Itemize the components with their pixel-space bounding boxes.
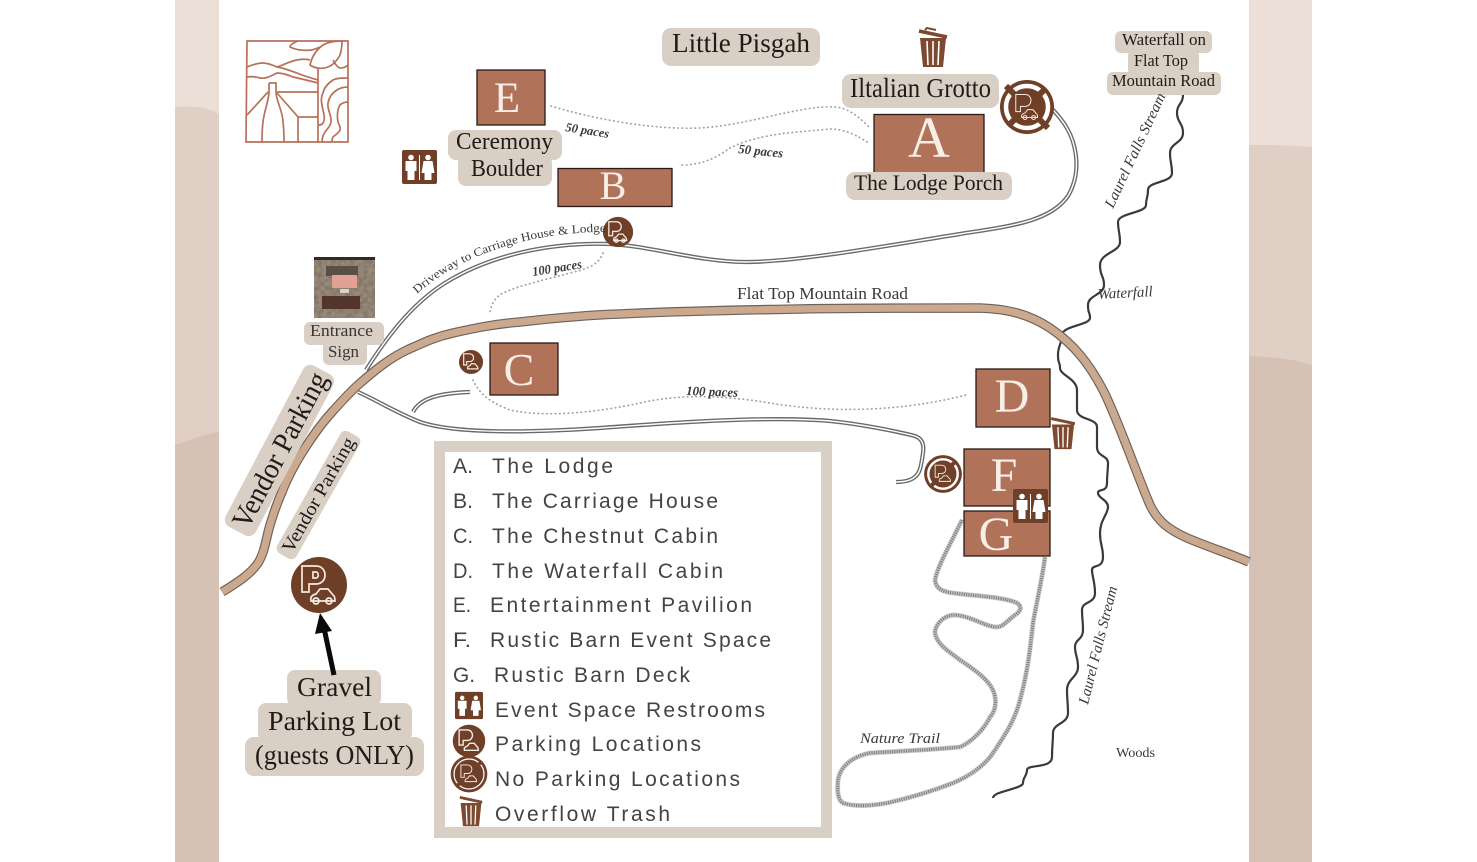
panel: legend xyxy=(440,446,826,832)
legend row F: Rustic Barn Event Space xyxy=(490,629,771,652)
legend row restrooms: Event Space Restrooms xyxy=(495,699,765,722)
label: Gravel Parking Lot (guests ONLY): (guests ONLY) xyxy=(255,740,414,770)
icon: no parking near lodge xyxy=(1000,80,1054,134)
legend row restrooms xyxy=(455,692,765,722)
legend row trash xyxy=(460,797,670,826)
building A: A xyxy=(908,105,950,170)
right background band xyxy=(1249,0,1312,862)
label: Gravel Parking Lot (guests ONLY): Gravel xyxy=(297,672,372,702)
label: The Lodge Porch: The Lodge Porch xyxy=(854,170,1003,195)
building E xyxy=(477,70,545,125)
caption: Nature Trail: Nature Trail xyxy=(859,731,940,747)
building G: G xyxy=(979,508,1013,561)
photo: entrance sign xyxy=(314,257,375,318)
legend row D: D. xyxy=(453,560,473,583)
label: Gravel Parking Lot (guests ONLY): Parking Lot xyxy=(268,706,402,736)
icon: parking at driveway xyxy=(603,217,633,247)
legend row B: B. xyxy=(453,490,473,513)
road: Flat Top Mountain Road xyxy=(222,308,1249,592)
caption: Waterfall: Waterfall xyxy=(1097,284,1153,303)
label: Ceremony Boulder xyxy=(448,129,562,186)
building D xyxy=(976,369,1050,427)
caption: 100 paces cabin: 100 paces xyxy=(686,383,738,400)
legend row B: The Carriage House xyxy=(492,490,718,513)
label: Little Pisgah xyxy=(662,28,820,66)
label: Italian Grotto: Iltalian Grotto xyxy=(850,73,991,103)
caption: 50 paces B: 50 paces xyxy=(738,141,784,161)
icon: restroom at barn xyxy=(1013,489,1048,523)
caption: 50 paces E: 50 paces xyxy=(565,120,610,141)
legend row no parking xyxy=(451,756,740,792)
label: Waterfall on Flat Top Mountain Road: Waterfall on xyxy=(1122,30,1206,49)
building B: B xyxy=(600,163,626,208)
legend row A: The Lodge xyxy=(492,455,613,478)
label: Waterfall on Flat Top Mountain Road: Flat Top xyxy=(1134,51,1188,70)
arrow: to gravel parking xyxy=(315,613,334,675)
building F xyxy=(964,449,1050,506)
caption: 100 paces driveway: 100 paces xyxy=(531,256,583,279)
label: Little Pisgah: Little Pisgah xyxy=(672,28,810,58)
building C: C xyxy=(504,344,534,395)
label: Ceremony Boulder: Boulder xyxy=(471,156,543,182)
legend row parking xyxy=(453,725,701,757)
icon: parking large xyxy=(291,557,347,613)
caption: Flat Top Mountain Road: Flat Top Mountain Road xyxy=(737,284,909,303)
icon: no parking near barn xyxy=(924,455,962,493)
label: Vendor Parking large: Vendor Parking xyxy=(226,367,334,534)
building D: D xyxy=(995,370,1029,423)
building E: E xyxy=(494,75,520,122)
stream: Laurel Falls Stream xyxy=(993,95,1183,798)
caption: Laurel Falls Stream lower: Laurel Falls Stream xyxy=(1076,585,1121,707)
label: Vendor Parking small: Vendor Parking xyxy=(278,433,360,557)
legend row E: E. xyxy=(453,594,471,617)
icon: trash at grotto xyxy=(919,28,947,67)
legend row parking: Parking Locations xyxy=(495,733,701,756)
legend row C: The Chestnut Cabin xyxy=(492,525,718,548)
label: Waterfall on Flat Top Mountain Road xyxy=(1107,30,1221,95)
icon: parking at chestnut cabin xyxy=(459,350,483,374)
label: Entrance Sign: Sign xyxy=(328,342,359,361)
dotted walking paths xyxy=(473,106,966,414)
building G xyxy=(964,508,1050,561)
left background band xyxy=(175,0,219,862)
legend row G: Rustic Barn Deck xyxy=(494,664,690,687)
legend row G: G. xyxy=(453,664,475,687)
label: Ceremony Boulder: Ceremony xyxy=(456,129,553,155)
label: Waterfall on Flat Top Mountain Road: Mountain Road xyxy=(1112,71,1216,90)
label: Entrance Sign: Entrance xyxy=(310,321,373,340)
building C xyxy=(490,343,558,395)
label: Entrance Sign xyxy=(304,321,384,365)
nature trail xyxy=(838,520,1045,806)
caption: Woods: Woods xyxy=(1116,746,1155,761)
legend row E: Entertainment Pavilion xyxy=(490,594,752,617)
legend row C: C. xyxy=(453,525,473,548)
lower driveway to barn and cabin xyxy=(358,392,923,482)
icon: trash near waterfall cabin xyxy=(1051,419,1075,449)
caption: Laurel Falls Stream upper: Laurel Falls Stream xyxy=(1102,90,1170,212)
caption: driveway curved text: Driveway to Carriage House & Lodge xyxy=(412,224,606,294)
building B xyxy=(558,163,672,208)
legend row D: The Waterfall Cabin xyxy=(492,560,723,583)
legend row A: A. xyxy=(453,455,473,478)
legend row trash: Overflow Trash xyxy=(495,803,670,826)
legend row no parking: No Parking Locations xyxy=(495,768,740,791)
icon: restroom at ceremony boulder xyxy=(402,150,437,184)
label: Gravel Parking Lot (guests ONLY) xyxy=(245,670,424,776)
logo: landscape with bottle xyxy=(246,41,348,142)
building A xyxy=(874,105,984,174)
building F: F xyxy=(991,449,1017,502)
driveway to carriage house and lodge xyxy=(366,95,1076,370)
legend row F: F. xyxy=(453,629,471,652)
